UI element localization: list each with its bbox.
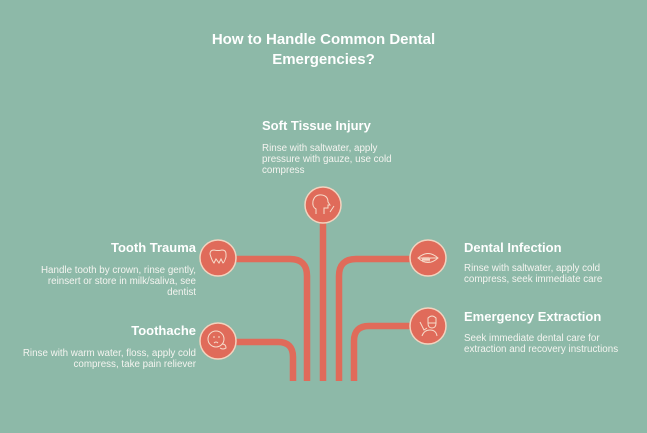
heading: tooth trauma: Tooth Trauma (111, 240, 196, 255)
connector: soft tissue (320, 215, 326, 381)
text: soft tissue injury: Rinse with saltwater, apply pressure with gauze, use cold compress (262, 143, 392, 176)
heading: emergency extraction: Emergency Extraction (464, 309, 601, 324)
icon: tooth trauma (200, 240, 236, 276)
connector: toothache (230, 342, 293, 381)
connector: extraction (354, 326, 416, 381)
connector: dental infection (339, 259, 416, 381)
icon: soft tissue (305, 187, 341, 223)
icon: dental infection (410, 240, 446, 276)
text: emergency extraction: Seek immediate dental care for extraction and recovery instructions (464, 333, 618, 355)
heading: soft tissue injury: Soft Tissue Injury (262, 118, 371, 133)
title: How to Handle Common Dental (212, 31, 435, 48)
title (212, 31, 435, 68)
heading: dental infection: Dental Infection (464, 240, 562, 255)
icon: toothache (200, 323, 236, 359)
text: tooth trauma: Handle tooth by crown, rinse gently, reinsert or store in milk/saliva, see dentist (41, 265, 196, 298)
text: toothache: Rinse with warm water, floss, apply cold compress, take pain reliever (23, 348, 196, 370)
title: Emergencies? (272, 51, 375, 68)
connector: tooth trauma (230, 259, 307, 381)
icon: emergency extraction (410, 308, 446, 344)
heading: toothache: Toothache (131, 323, 196, 338)
text: dental infection: Rinse with saltwater, apply cold compress, seek immediate care (464, 263, 602, 285)
